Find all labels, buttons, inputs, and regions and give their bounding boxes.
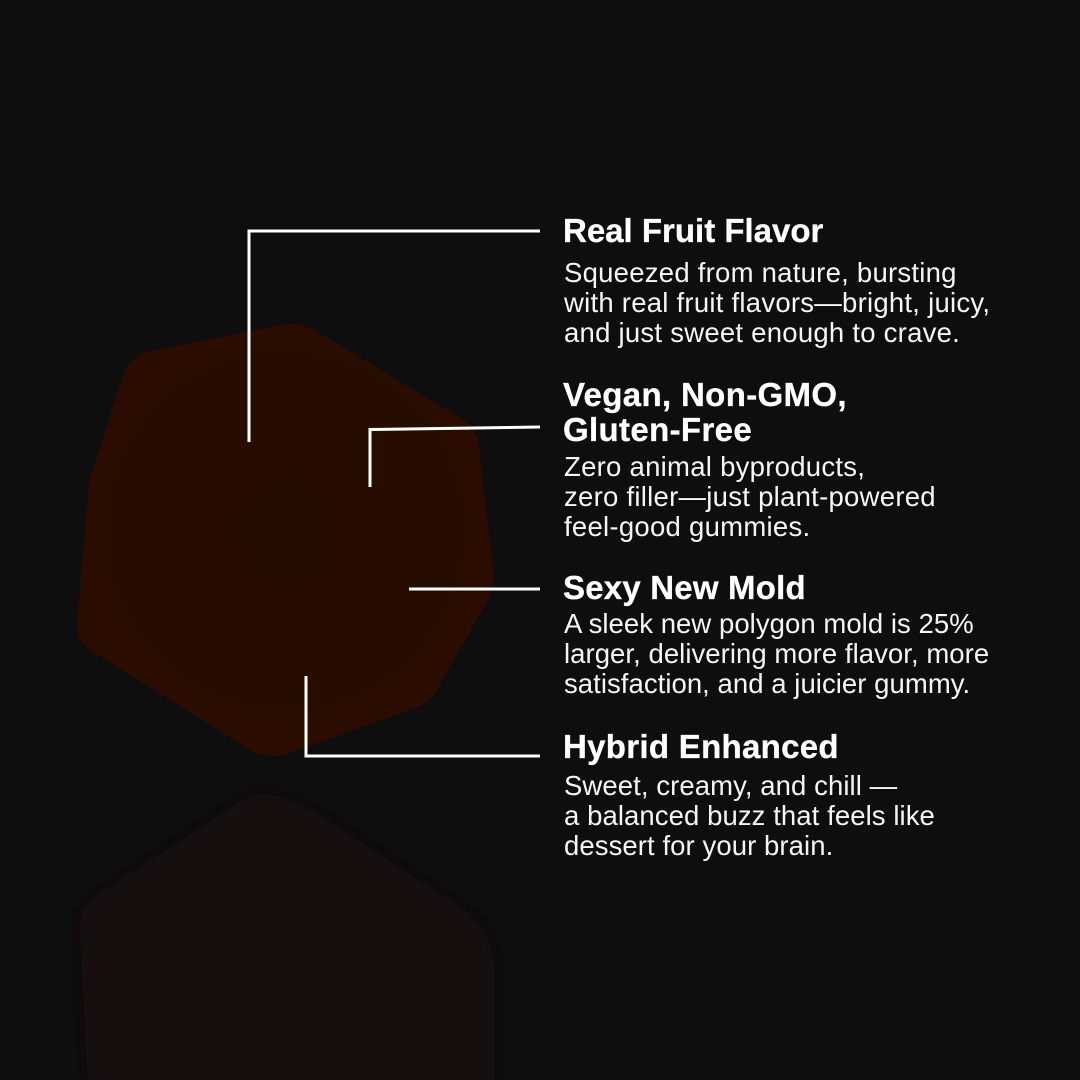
connector: real fruit flavor — [249, 231, 540, 442]
text: real fruit flavor description: Squeezed from nature, bursting — [564, 257, 957, 288]
text: vegan description: zero filler—just plant-powered — [564, 481, 936, 512]
text: real fruit flavor description: and just sweet enough to crave. — [564, 317, 960, 348]
text: hybrid enhanced description: dessert for your brain. — [564, 830, 833, 861]
connector: vegan non-gmo gluten-free — [370, 427, 540, 487]
text: sexy new mold description: larger, delivering more flavor, more — [564, 638, 989, 669]
gummy reflection — [80, 794, 494, 1080]
text: hybrid enhanced description: a balanced buzz that feels like — [564, 800, 935, 831]
text: vegan description — [564, 451, 936, 542]
text: vegan description: Zero animal byproducts, — [564, 451, 865, 482]
heading: vegan non-gmo gluten-free: Vegan, Non-GMO, — [563, 376, 847, 413]
heading: hybrid enhanced: Hybrid Enhanced — [563, 728, 839, 765]
text: sexy new mold description: satisfaction, and a juicier gummy. — [564, 668, 970, 699]
connector: hybrid enhanced — [306, 676, 540, 756]
heading: sexy new mold: Sexy New Mold — [563, 569, 806, 606]
text: real fruit flavor description — [564, 257, 990, 348]
heading: vegan non-gmo gluten-free — [563, 376, 847, 448]
text: sexy new mold description — [564, 608, 989, 699]
text: hybrid enhanced description — [564, 770, 935, 861]
connector: sexy new mold — [409, 588, 540, 590]
gummy body — [77, 324, 493, 756]
text: sexy new mold description: A sleek new polygon mold is 25% — [564, 608, 974, 639]
text: real fruit flavor description: with real fruit flavors—bright, juicy, — [564, 287, 990, 318]
heading: vegan non-gmo gluten-free: Gluten-Free — [563, 411, 752, 448]
text: hybrid enhanced description: Sweet, creamy, and chill — — [564, 770, 897, 801]
heading: real fruit flavor: Real Fruit Flavor — [563, 212, 823, 249]
text: vegan description: feel-good gummies. — [564, 511, 810, 542]
